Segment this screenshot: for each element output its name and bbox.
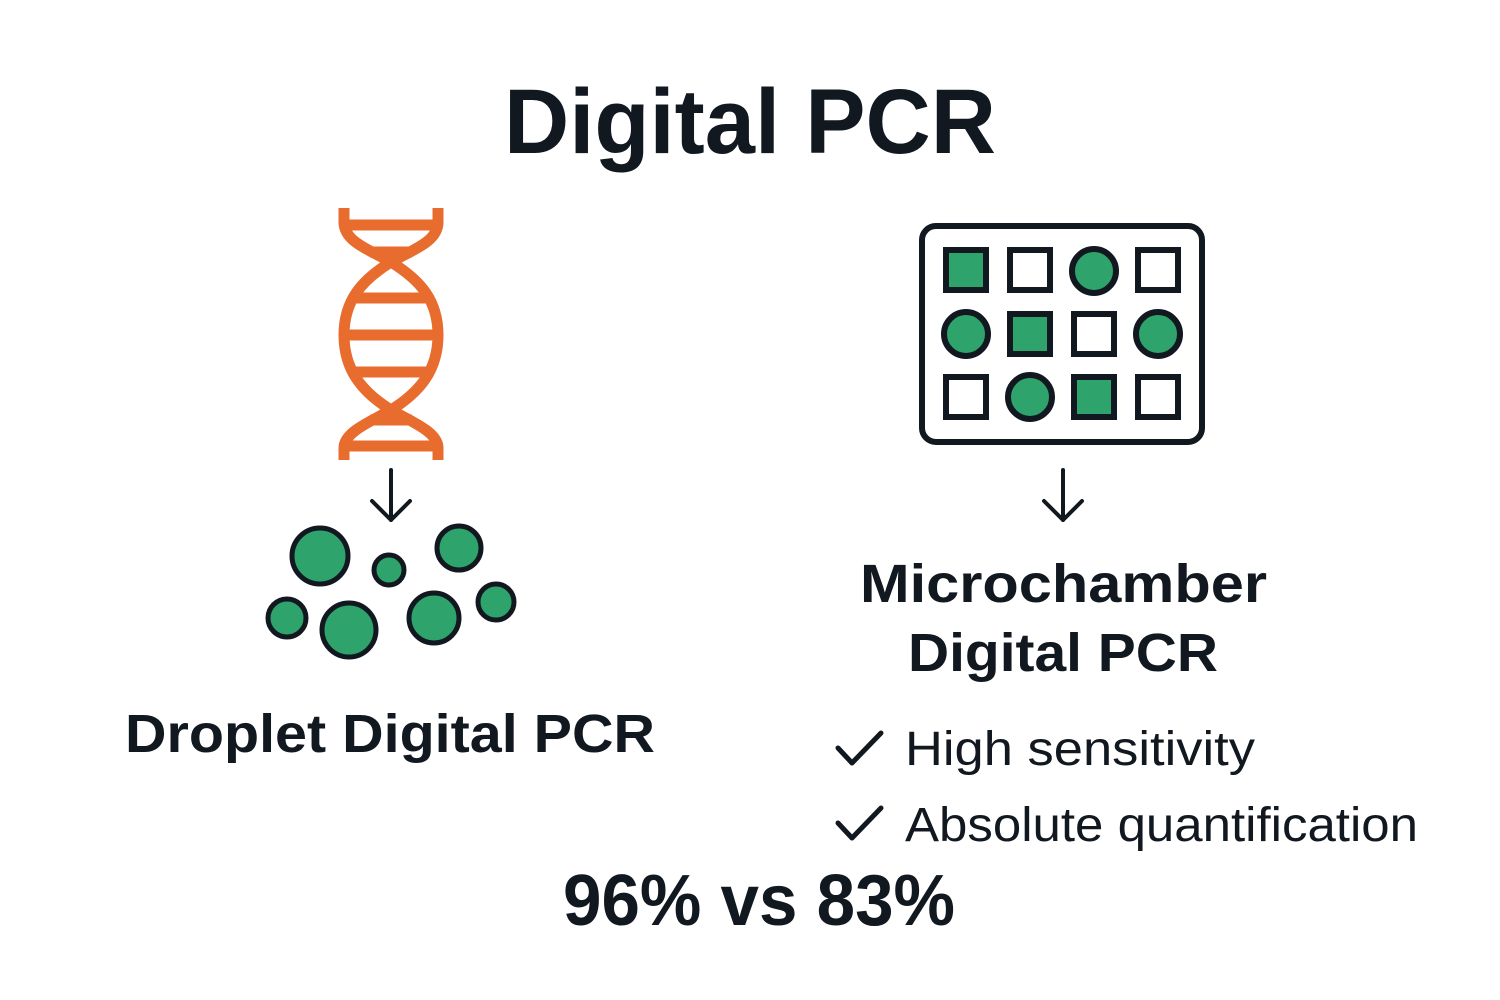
label: microchamber digital PCR: Microchamber bbox=[860, 554, 1267, 614]
label: microchamber digital PCR bbox=[860, 554, 1267, 683]
text: high sensitivity: High sensitivity bbox=[905, 723, 1255, 776]
arrow: left down bbox=[372, 470, 410, 520]
label: microchamber digital PCR: Digital PCR bbox=[908, 623, 1218, 683]
arrow: right down bbox=[1044, 470, 1082, 520]
checklist: benefits bbox=[838, 723, 1418, 852]
icon: DNA helix bbox=[344, 208, 438, 460]
icon: droplets bbox=[268, 526, 514, 657]
icon: microchamber chip bbox=[922, 226, 1202, 442]
icon: check 1 bbox=[838, 733, 881, 763]
stat: comparison: 96% vs 83% bbox=[563, 861, 955, 941]
label: droplet digital PCR: Droplet Digital PCR bbox=[125, 704, 655, 764]
title: Digital PCR bbox=[504, 71, 996, 173]
text: absolute quantification: Absolute quantification bbox=[905, 799, 1418, 852]
icon: check 2 bbox=[838, 808, 881, 838]
